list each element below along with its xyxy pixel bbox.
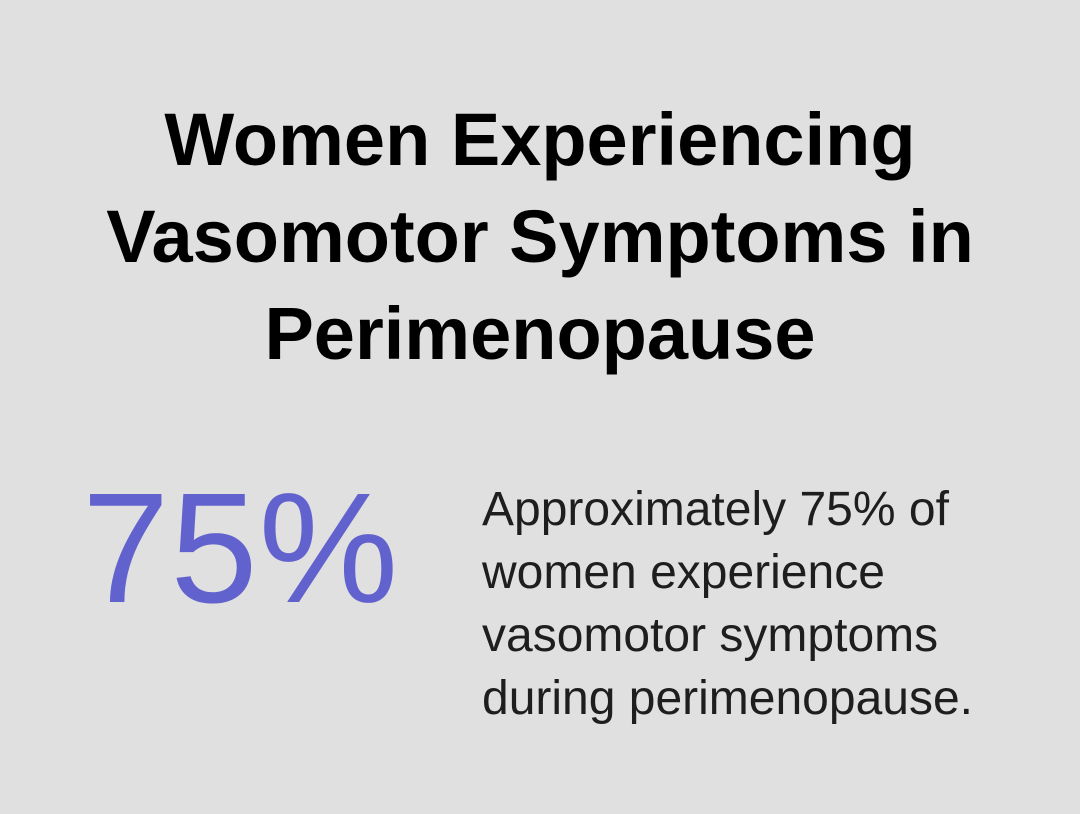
description text: women experience: [482, 546, 885, 599]
title: [106, 98, 974, 375]
description text: vasomotor symptoms: [482, 609, 938, 662]
description text: [482, 483, 973, 725]
title: Vasomotor Symptoms in: [106, 195, 974, 278]
big stat: 75%: 75%: [82, 461, 399, 636]
title: Perimenopause: [264, 292, 816, 375]
description text: during perimenopause.: [482, 672, 973, 725]
description text: Approximately 75% of: [482, 483, 949, 536]
title: Women Experiencing: [164, 98, 916, 181]
